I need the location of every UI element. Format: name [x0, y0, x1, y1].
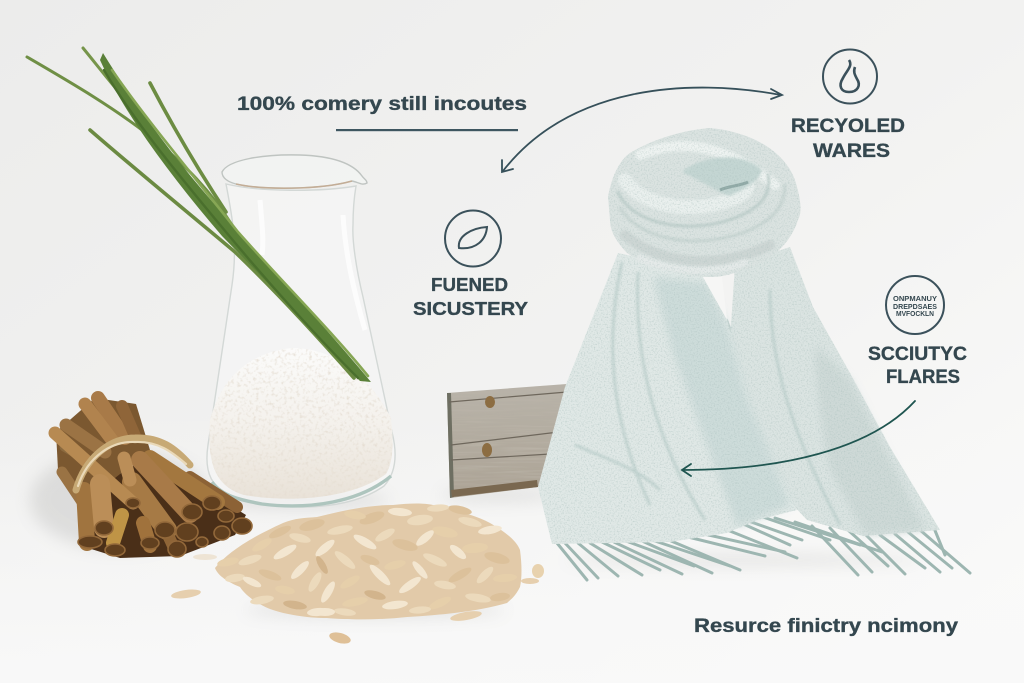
label: RECYOLED — [791, 115, 905, 137]
label — [413, 274, 529, 319]
white rice fill — [209, 348, 393, 499]
ground shadows — [30, 450, 925, 617]
swirl center — [682, 157, 762, 196]
label — [791, 115, 905, 162]
brown rice pile — [171, 504, 544, 646]
glass rim and spout — [222, 155, 367, 188]
stripe — [653, 277, 790, 527]
scarf fringe — [557, 516, 970, 580]
label: SICUSTERY — [413, 298, 529, 319]
icon: leaf — [445, 210, 501, 266]
scarf gap — [703, 277, 727, 320]
icon: badge with tiny text: MVFOCKLN — [896, 311, 934, 318]
icon: badge with tiny text: ONPMANUY — [893, 296, 937, 303]
footer caption: Resurce finictry ncimony — [694, 616, 958, 637]
heading underline — [336, 129, 518, 131]
label: FUENED — [431, 274, 508, 295]
wooden block — [447, 384, 567, 498]
icon: badge with tiny text — [886, 276, 944, 334]
fold shading — [575, 262, 840, 525]
callout: recycled wares — [791, 50, 905, 162]
label: WARES — [813, 140, 890, 162]
swirl bands — [618, 146, 785, 270]
label: SCCIUTYC — [868, 344, 967, 365]
rice grains — [216, 504, 517, 617]
icon: badge with tiny text: DREPDSAES — [893, 304, 937, 311]
left panel — [538, 253, 797, 544]
label: FLARES — [886, 367, 960, 388]
curved arrow to scarf — [682, 401, 915, 476]
cinnamon bundle — [55, 398, 252, 558]
scarf body with speckle — [538, 247, 940, 544]
twine binding — [76, 438, 190, 490]
back layers — [690, 275, 775, 440]
heading: 100% comery still incoutes — [237, 93, 527, 115]
wood knots — [482, 396, 495, 457]
glass body — [207, 184, 395, 507]
label — [868, 344, 967, 388]
scarf coil — [608, 128, 800, 277]
scarf — [538, 128, 970, 580]
glass beaker with white rice — [207, 155, 395, 507]
glass base rim — [212, 476, 391, 506]
icon: water drop — [823, 50, 877, 104]
glass highlights — [260, 200, 365, 330]
right panel — [730, 247, 940, 536]
green grass stalks — [27, 48, 371, 382]
loose grains — [171, 554, 544, 646]
callout: scciutyc flares — [868, 276, 967, 388]
right panel stripe — [815, 345, 925, 535]
double-headed curved arrow — [502, 88, 782, 172]
callout: fuened sicustery — [413, 210, 529, 319]
cinnamon stick ends — [78, 496, 252, 557]
